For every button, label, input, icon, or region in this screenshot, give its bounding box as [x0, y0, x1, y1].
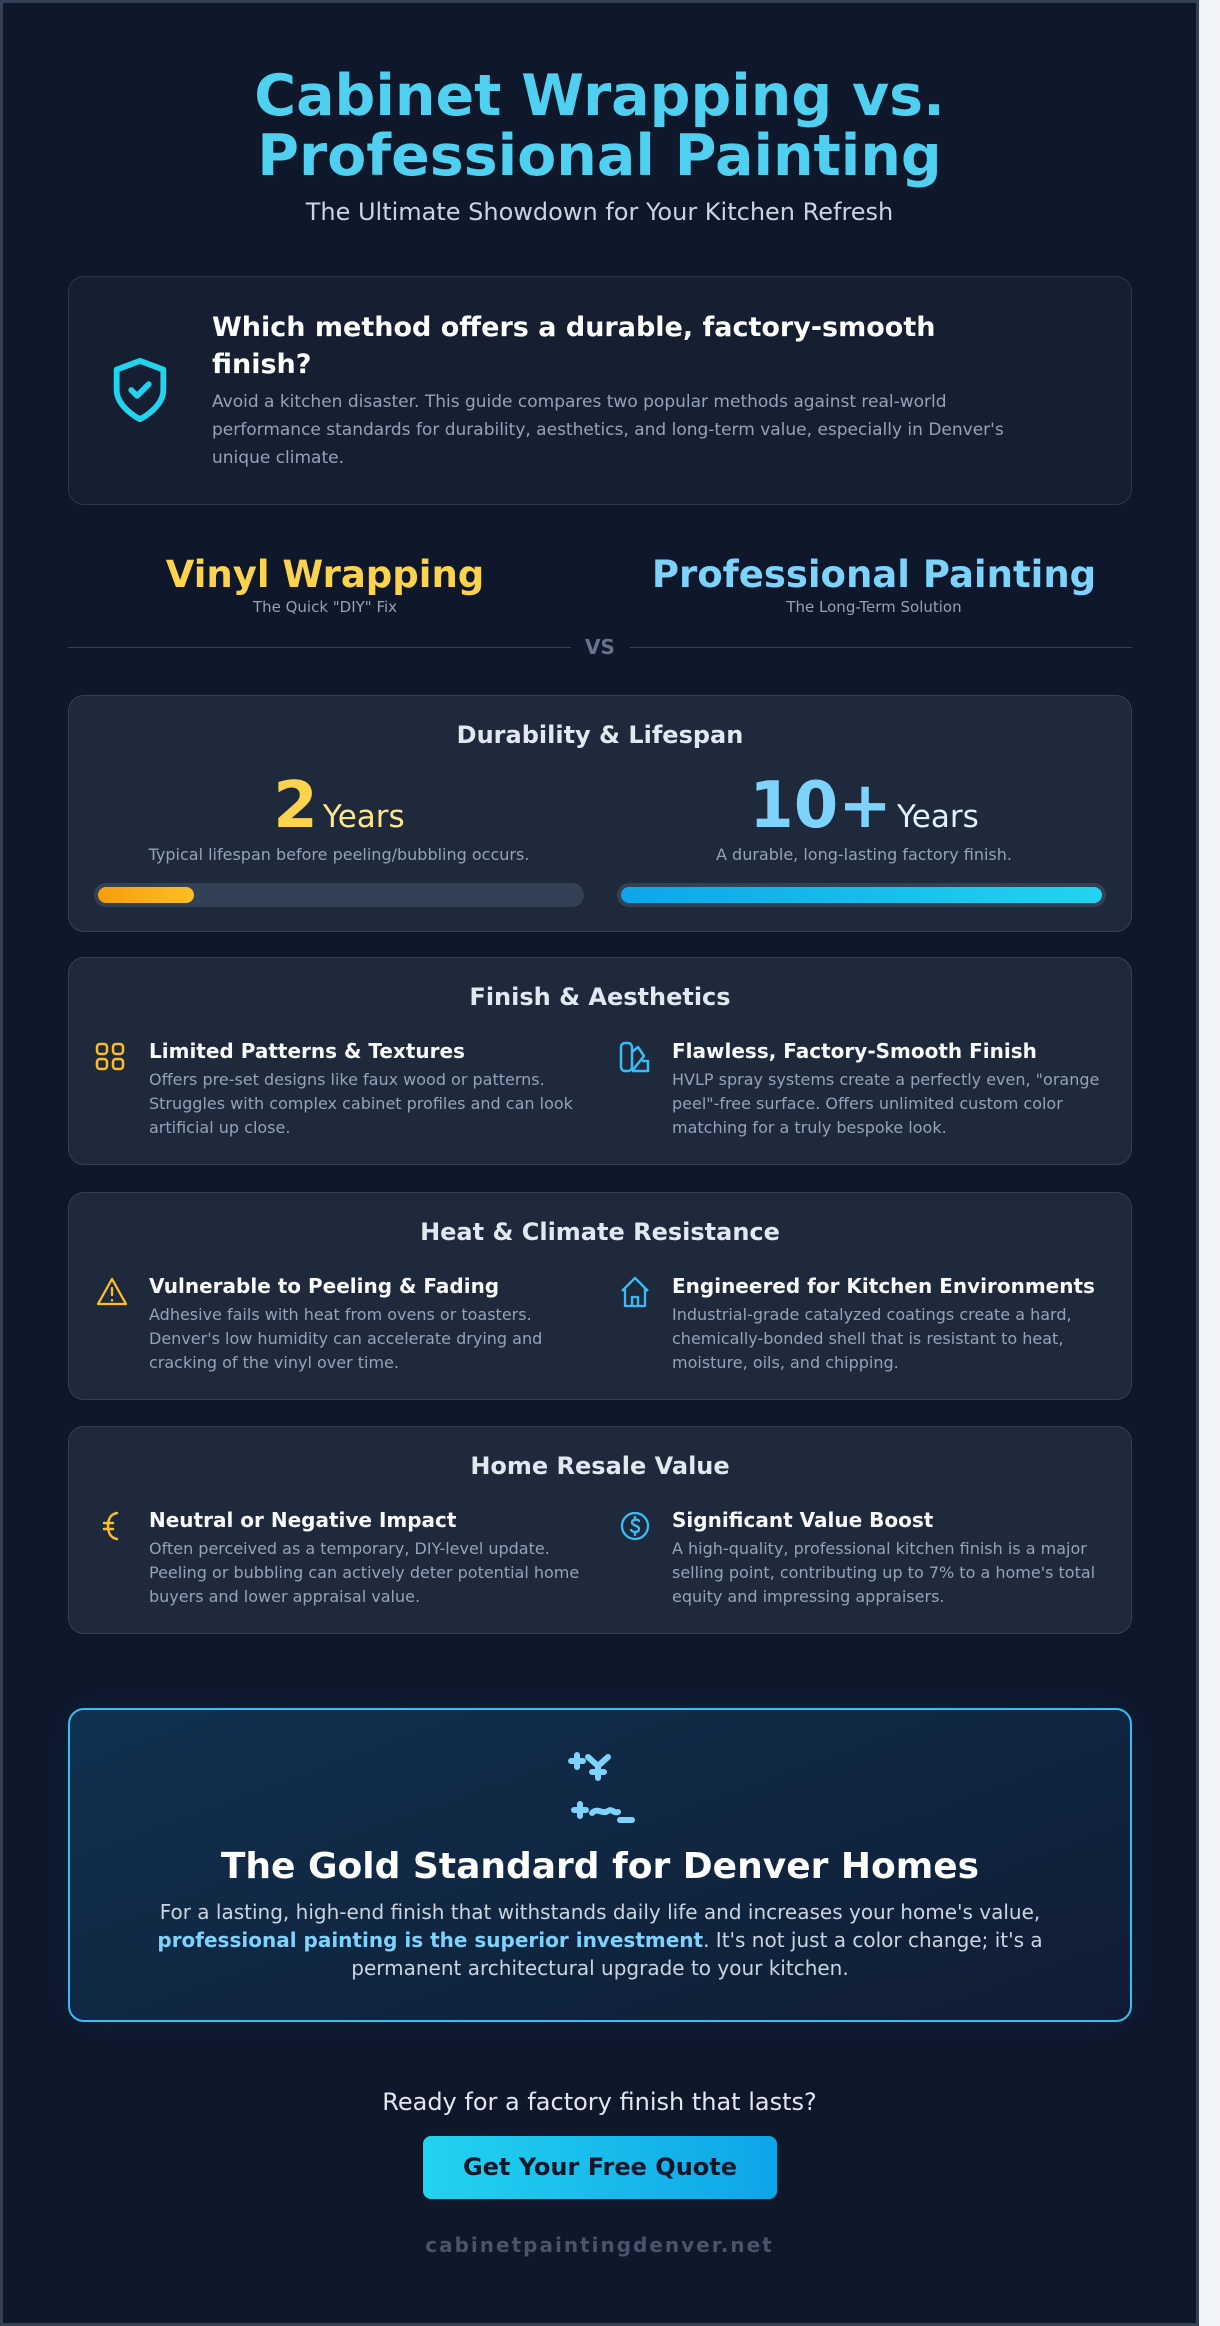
cta button: Get Your Free Quote [463, 2153, 737, 2181]
title: Professional Painting [257, 123, 942, 189]
stat: 10+ years: 10+ Years [749, 769, 979, 843]
panel: resale: Significant Value Boost [672, 1508, 933, 1532]
panel: resale: A high-quality, professional kitchen finish is a major selling point, contributing up to 7% to a home's total equity and impressing appraisers. [672, 1539, 1095, 1606]
subtitle: The Ultimate Showdown for Your Kitchen Refresh [306, 198, 893, 226]
panel: heat: Vulnerable to Peeling & Fading [149, 1274, 499, 1298]
panel: finish: Limited Patterns & Textures [149, 1039, 465, 1063]
bar: painting [617, 883, 1106, 907]
icon: sparkle glyphs [568, 1752, 635, 1823]
panel: durability: Typical lifespan before peeling/bubbling occurs. [149, 845, 529, 864]
stat: 2 years: 2 Years [273, 769, 405, 843]
panel: finish: Finish & Aesthetics [469, 983, 731, 1011]
panel: heat: Adhesive fails with heat from ovens or toasters. Denver's low humidity can accelerate drying and cracking of the vinyl over time. [149, 1305, 542, 1372]
intro card [68, 276, 1132, 505]
icon: dollar [620, 1512, 650, 1540]
panel: durability [68, 695, 1132, 932]
panel: heat: Engineered for Kitchen Environments [672, 1274, 1095, 1298]
heading: finish? [212, 349, 311, 380]
column header: painting [652, 553, 1096, 616]
title: Cabinet Wrapping vs. [254, 63, 945, 129]
panel: finish: HVLP spray systems create a perfectly even, "orange peel"-free surface. Offers unlimited custom color matching for a truly bespoke look. [672, 1070, 1099, 1137]
icon: grid [96, 1042, 124, 1070]
panel: finish [68, 957, 1132, 1165]
panel: durability: Durability & Lifespan [457, 721, 743, 749]
icon: warning [96, 1278, 128, 1306]
callout heading: The Gold Standard for Denver Homes [221, 1846, 979, 1887]
cta prompt: Ready for a factory finish that lasts? [382, 2088, 817, 2116]
footer url: cabinetpaintingdenver.net [425, 2233, 774, 2257]
icon: shield check [114, 358, 166, 422]
panel: heat: Industrial-grade catalyzed coatings create a hard, chemically-bonded shell that is resistant to heat, moisture, oils, and chipping. [672, 1305, 1072, 1372]
heading: Which method offers a durable, factory-smooth [212, 312, 936, 343]
item: engineered [621, 1274, 1095, 1372]
cta button [423, 2136, 777, 2199]
item: neutral impact [102, 1508, 579, 1606]
item: limited patterns [96, 1039, 573, 1137]
item: value boost [620, 1508, 1095, 1606]
column header: vinyl [166, 553, 484, 616]
panel: resale: Home Resale Value [470, 1452, 730, 1480]
intro text: Avoid a kitchen disaster. This guide compares two popular methods against real-world performance standards for durability, aesthetics, and long-term value, especially in Denver's unique climate. [212, 392, 1004, 468]
icon: swatch [620, 1042, 650, 1072]
panel: finish: Flawless, Factory-Smooth Finish [672, 1039, 1037, 1063]
column header: vinyl: The Quick "DIY" Fix [253, 598, 397, 616]
panel: durability: A durable, long-lasting factory finish. [716, 845, 1012, 864]
heading [212, 312, 936, 380]
icon: house [621, 1276, 649, 1308]
panel: heat: Heat & Climate Resistance [420, 1218, 780, 1246]
item: vulnerable [96, 1274, 542, 1372]
panel: heat [68, 1192, 1132, 1400]
panel: resale [68, 1426, 1132, 1634]
panel: resale: Neutral or Negative Impact [149, 1508, 456, 1532]
callout: gold standard [68, 1708, 1132, 2022]
bar: vinyl [94, 883, 584, 907]
item: flawless finish [620, 1039, 1099, 1137]
title [254, 63, 945, 189]
icon: euro [102, 1512, 118, 1540]
column header: painting: The Long-Term Solution [786, 598, 962, 616]
panel: finish: Offers pre-set designs like faux wood or patterns. Struggles with complex cabinet profiles and can look artificial up close. [149, 1070, 573, 1137]
callout text: For a lasting, high-end finish that withstands daily life and increases your home's value, professional painting is the superior investment. It's not just a color change; it's a permanent architectural upgrade to your kitchen. [157, 1900, 1043, 1980]
column header: vinyl: Vinyl Wrapping [166, 553, 484, 596]
panel: resale: Often perceived as a temporary, DIY-level update. Peeling or bubbling can actively deter potential home buyers and lower appraisal value. [149, 1539, 579, 1606]
column header: painting: Professional Painting [652, 553, 1096, 596]
vs label: VS [585, 635, 615, 659]
